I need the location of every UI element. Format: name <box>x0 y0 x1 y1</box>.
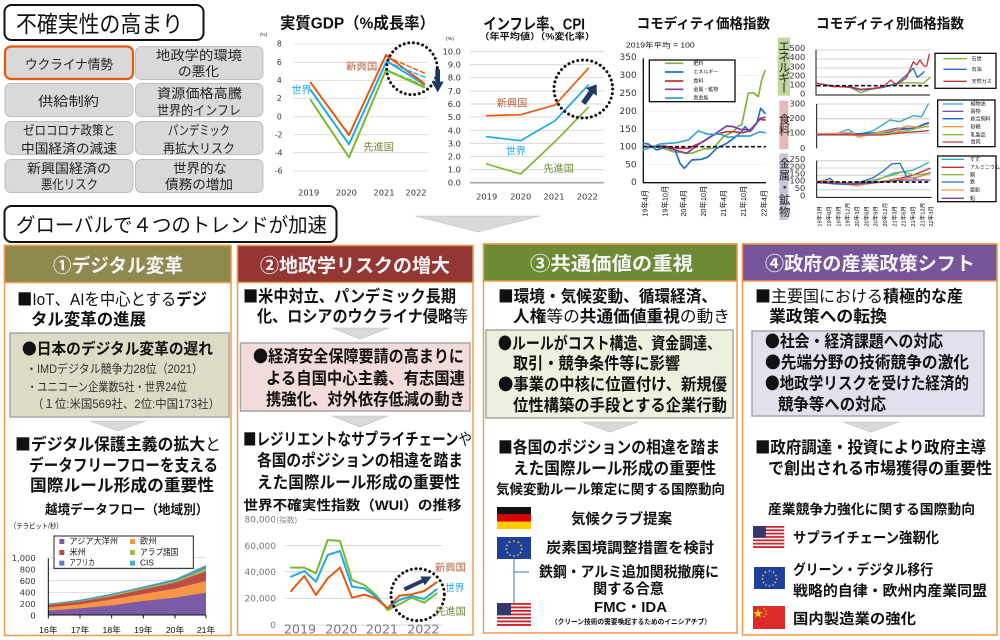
factor: zero covid: 中国経済の減速 <box>21 141 117 156</box>
callout: Japan's digital lag: （１位:米国569社、2位:中国173社） <box>32 396 220 411</box>
callout: rules and corporate action: ●事業の中核に位置付け、新規優 <box>498 371 727 395</box>
factor: supply constraints <box>5 84 133 116</box>
flag: China <box>753 606 785 629</box>
panel: 3 shared value <box>484 244 737 633</box>
metals x-axis labels <box>816 203 935 227</box>
callout: Japan's digital lag: ・IMDデジタル競争力28位（2021） <box>26 361 203 376</box>
chart: CPI inflation: (%) <box>446 36 454 42</box>
chart: cross-border data flow: 16年 <box>39 624 58 635</box>
text: carbon border adjustment: 炭素国境調整措置を検討 <box>546 539 715 557</box>
metals x-axis labels: 21年12月 <box>918 203 926 227</box>
text: digital protectionism: ■デジタル保護主義の拡大と <box>15 431 221 455</box>
panel: 1 digital transformation <box>4 246 231 636</box>
food legend <box>938 100 995 147</box>
energy line chart: 100 <box>789 80 805 90</box>
chart: CPI inflation: 先進国 <box>543 162 574 175</box>
chart: cross-border data flow: 800 <box>20 564 36 574</box>
metals legend: 鉛 <box>970 195 975 202</box>
panel: 2 geopolitical risk <box>238 246 473 637</box>
factor: resource prices: 資源価格高騰 <box>157 86 242 101</box>
metals x-axis labels: 21年3月 <box>890 206 898 227</box>
text: government-led markets: で創出される市場獲得の重要性 <box>768 458 992 478</box>
category label: food <box>778 101 790 149</box>
chart: commodity price index: 21年4月 <box>719 190 728 217</box>
chart: real GDP growth: 2019 <box>298 188 319 198</box>
header: digital transformation: ①デジタル変革 <box>53 254 183 277</box>
data flow legend: CIS <box>140 558 154 568</box>
metals x-axis labels: 22年3月 <box>927 206 935 227</box>
callout: economic security: ●経済安全保障要請の高まりに <box>253 343 464 367</box>
metals x-axis labels: 19年6月 <box>825 206 833 227</box>
text: environment and human rights <box>498 283 730 326</box>
chart: CPI inflation: 2020 <box>510 191 531 201</box>
chart: CPI inflation: 7.0 <box>448 86 461 96</box>
chart: price index by commodity <box>777 14 1000 227</box>
text: green digital transition: グリーン・デジタル移行 <box>793 561 933 579</box>
energy legend: 石油 <box>972 66 982 73</box>
food legend: 乳製品 <box>971 131 986 138</box>
chart: commodity price index: 150 <box>620 125 637 135</box>
text: steel and aluminium agreement: 鉄鋼・アルミ追加関税撤廃に <box>539 563 719 581</box>
chart: CPI inflation <box>442 15 613 201</box>
header: industrial policy: ④政府の産業政策シフト <box>765 253 975 275</box>
chart: real GDP growth <box>260 13 444 198</box>
flag: USA <box>497 603 531 626</box>
chart: CPI inflation: 3.0 <box>448 138 461 148</box>
callout: Japan's digital lag <box>10 333 229 417</box>
chart: world uncertainty index: 世界 <box>445 583 464 595</box>
metals x-axis labels: 20年6月 <box>862 206 870 227</box>
chart: world uncertainty index: 2019 <box>284 622 316 637</box>
callout: policy drivers: ●社会・経済課題への対応 <box>765 328 943 352</box>
text: US-China, pandemic, Russia: ■米中対立、パンデミック長期 <box>243 283 456 307</box>
chart: world uncertainty index: 先進国 <box>435 605 466 618</box>
text: FMC IDA: （クリーン技術の需要喚起するためのイニシアチブ） <box>551 617 711 626</box>
callout: rules and corporate action <box>486 330 733 418</box>
text: digital transformation progress: タル変革の進展 <box>31 310 146 329</box>
text: active industrial policy <box>755 283 963 326</box>
food line chart: 200 <box>789 113 805 123</box>
chart: commodity price index: 22年4月 <box>760 190 769 217</box>
energy line chart: 200 <box>789 70 805 80</box>
category label: metals: 金属・鉱物 <box>778 157 790 217</box>
chart: cross-border data flow: 18年 <box>103 624 121 635</box>
chart: CPI inflation: 6.0 <box>448 99 461 109</box>
chart: real GDP growth: 新興国 <box>346 60 377 73</box>
energy line chart: 300 <box>789 61 805 71</box>
text: green digital transition <box>793 561 988 600</box>
text: resilient supply chains: ■レジリエントなサプライチェーンや <box>243 426 472 450</box>
food legend: 砂糖 <box>971 123 981 130</box>
text: environment and human rights: 人権等の共通価値重視の動き <box>513 307 730 326</box>
chart: cross-border data flow <box>10 502 215 635</box>
metals line chart: 50 <box>795 183 805 193</box>
header: geopolitical risk: ②地政学リスクの増大 <box>260 254 450 277</box>
chart: CPI inflation: （年平均値）（%変化率） <box>479 30 595 41</box>
chart: commodity price index: 250 <box>620 89 637 99</box>
callout: rules and corporate action: 取引・競争条件等に影響 <box>513 353 680 373</box>
text: green digital transition: 戦略的自律・欧州内産業同盟 <box>793 582 988 600</box>
food legend: 食肉 <box>971 139 981 146</box>
metals line chart: 250 <box>789 154 805 164</box>
energy line chart: 400 <box>789 52 805 62</box>
metals x-axis labels: 19年3月 <box>816 206 824 227</box>
factor: emerging economies <box>5 160 133 192</box>
heading: four global trends <box>4 206 336 242</box>
chart: CPI inflation: 2019 <box>476 191 497 201</box>
by-commodity title: コモディティ別価格指数 <box>816 14 965 32</box>
chart: cross-border data flow: 1,000 <box>12 553 36 563</box>
heading: uncertainty <box>4 5 204 40</box>
chart: world uncertainty index: 20,000 <box>245 595 276 605</box>
text: government-led markets <box>755 434 992 478</box>
metals legend: 銅 <box>970 171 975 178</box>
chart: cross-border data flow: 600 <box>20 576 36 586</box>
factor: pandemic <box>136 122 263 156</box>
category label: energy: エネルギー <box>777 40 791 94</box>
chart: real GDP growth: 8 <box>277 40 282 49</box>
text: domestic manufacturing: 国内製造業の強化 <box>793 610 917 628</box>
callout: economic security: よる自国中心主義、有志国連 <box>266 368 465 388</box>
food line chart: 300 <box>789 98 805 108</box>
chart: commodity price index: 21年10月 <box>739 186 748 217</box>
food legend: 総合飼料 <box>971 115 991 122</box>
chart: real GDP growth: 先進国 <box>363 140 394 153</box>
factor: zero covid: ゼロコロナ政策と <box>23 123 115 138</box>
text: US-China, pandemic, Russia: 化、ロシアのウクライナ侵略等 <box>257 307 468 326</box>
chart: real GDP growth: 2021 <box>373 188 395 198</box>
callout: policy drivers: 競争等への対応 <box>778 394 886 414</box>
text: resilient supply chains: 各国のポジションの相違を踏ま <box>257 450 463 470</box>
text: steel and aluminium agreement <box>539 563 719 598</box>
commodity index legend: 肥料 <box>693 60 703 67</box>
energy line chart <box>789 43 930 99</box>
callout: Japan's digital lag: ●日本のデジタル変革の遅れ <box>22 337 213 359</box>
CPI title: インフレ率、CPI <box>483 15 585 33</box>
arrow: down <box>90 421 146 431</box>
chart: commodity price index: 20年4月 <box>679 190 688 217</box>
chart: cross-border data flow: 20年 <box>166 624 184 635</box>
chart: real GDP growth: 0 <box>277 112 282 121</box>
text: digital transformation progress <box>17 286 207 329</box>
energy legend: 天然ガス <box>972 78 992 85</box>
chart: real GDP growth: 2 <box>277 94 282 103</box>
data flow title: 越境データフロー（地域別） <box>45 502 208 517</box>
commodity index legend: エネルギー <box>693 70 718 76</box>
food legend: 穀物 <box>971 108 981 115</box>
data flow legend: 米州 <box>69 547 86 557</box>
chart: world uncertainty index: 60,000 <box>245 542 276 552</box>
chart: world uncertainty index: 2022 <box>407 622 439 637</box>
chart: commodity price index: 200 <box>620 107 637 117</box>
chart: real GDP growth: -6 <box>275 167 283 176</box>
metals x-axis labels: 21年6月 <box>900 206 908 227</box>
food line chart: 0 <box>800 143 805 153</box>
chart: cross-border data flow: 0 <box>30 610 36 620</box>
chart: CPI inflation: 9.0 <box>448 60 461 70</box>
commodity index legend: 金属・鉱物 <box>693 86 718 93</box>
connector line <box>514 559 529 603</box>
text: government-led markets: ■政府調達・投資により政府主導 <box>755 434 986 458</box>
metals legend: すず <box>970 156 980 163</box>
food legend: 植物油 <box>971 101 986 108</box>
chart: real GDP growth: (%) <box>260 32 268 37</box>
text: steel and aluminium agreement: 関する合意 <box>593 581 664 598</box>
metals x-axis labels: 20年12月 <box>881 203 889 227</box>
metals x-axis labels: 20年9月 <box>872 206 880 227</box>
chart: real GDP growth: 2020 <box>336 188 357 198</box>
metals x-axis labels: 19年9月 <box>834 206 842 227</box>
metals line chart <box>789 154 932 200</box>
data flow legend: アラブ諸国 <box>140 547 178 557</box>
metals line chart: 200 <box>789 161 805 171</box>
text: digital protectionism <box>15 431 221 495</box>
chart: cross-border data flow: 17年 <box>71 624 89 635</box>
metals x-axis labels: 19年12月 <box>844 203 852 227</box>
factor: supply constraints: 供給制約 <box>38 94 99 109</box>
GDP title: 実質GDP（%成長率） <box>280 13 435 32</box>
metals line chart: 0 <box>800 190 805 200</box>
energy legend: 石炭 <box>972 55 982 62</box>
heading: uncertainty: 不確実性の高まり <box>16 11 183 37</box>
chart: CPI inflation: 新興国 <box>497 97 527 110</box>
text: active industrial policy: 業政策への転換 <box>769 306 888 326</box>
metals line chart: 100 <box>789 176 805 186</box>
factor: Ukraine: ウクライナ情勢 <box>25 57 113 72</box>
factor: pandemic: 再拡大リスク <box>163 141 235 156</box>
subheading: climate rule trends: 気候変動ルール策定に関する国際動向 <box>496 481 725 497</box>
data flow legend: アフリカ <box>69 558 95 568</box>
chart: real GDP growth: 4 <box>277 76 282 85</box>
chart: CPI inflation: 2.0 <box>448 152 461 162</box>
chart: world uncertainty index: 0 <box>270 621 276 631</box>
text: US-China, pandemic, Russia <box>243 283 468 326</box>
chart: commodity price index: 19年4月 <box>641 190 650 217</box>
food line chart <box>789 98 930 153</box>
chart: real GDP growth: -2 <box>275 130 283 139</box>
data flow legend: アジア大洋州 <box>69 536 118 546</box>
header: shared value: ③共通価値の重視 <box>530 253 693 275</box>
text: FMC IDA: FMC・IDA <box>594 600 668 616</box>
chart: commodity price index: 20年10月 <box>699 186 708 217</box>
subheading: industrial competitiveness trends: 産業競争力強化に関する国際動向 <box>768 501 975 517</box>
chart: commodity price index: 0 <box>631 178 637 188</box>
text: international rule making: ■各国のポジションの相違を踏ま <box>498 434 720 458</box>
header: geopolitical risk <box>238 246 473 282</box>
flag: Germany <box>497 507 531 529</box>
text: digital transformation progress: ■IoT、AIを中心とするデジ <box>17 286 207 310</box>
commodity index legend: 食料 <box>693 78 703 85</box>
flag: EU <box>754 567 785 589</box>
metals line chart: 150 <box>789 169 805 179</box>
factor: geopolitics <box>136 46 263 80</box>
chart: CPI inflation: 0.0 <box>448 178 461 188</box>
factor: debt <box>136 160 263 192</box>
chart: world uncertainty index: 2021 <box>366 622 398 637</box>
chart: CPI inflation: 10.0 <box>442 47 461 57</box>
callout: Japan's digital lag: ・ユニコーン企業数5社・世界24位 <box>27 379 187 394</box>
chart: cross-border data flow: 19年 <box>134 624 153 635</box>
arrow: down <box>582 422 638 432</box>
chart: world uncertainty index <box>243 497 466 637</box>
flag: USA <box>753 526 784 548</box>
chart: world uncertainty index: 40,000 <box>245 568 276 578</box>
arrow: down <box>332 416 388 427</box>
factor: Ukraine <box>5 46 133 79</box>
metals x-axis labels: 20年3月 <box>853 206 861 227</box>
text: environment and human rights: ■環境・気候変動、循環経済、 <box>498 283 717 307</box>
header: industrial policy <box>742 244 997 281</box>
food line chart: 100 <box>789 128 805 138</box>
chart: real GDP growth: 2022 <box>405 188 427 198</box>
chart: CPI inflation: 2021 <box>543 191 565 201</box>
commodity index legend <box>649 60 735 102</box>
commodity index legend: 貴金属 <box>693 95 708 102</box>
metals legend: 鉄 <box>970 179 975 186</box>
callout: policy drivers <box>752 328 984 416</box>
chart: world uncertainty index: (指数) <box>277 514 298 524</box>
callout: rules and corporate action: 位性構築の手段とする企業行動 <box>513 395 727 415</box>
text: digital protectionism: 国際ルール形成の重要性 <box>30 475 214 495</box>
chart: cross-border data flow: 400 <box>20 588 36 598</box>
factor: zero covid <box>5 122 133 156</box>
chart: real GDP growth: -4 <box>275 148 283 157</box>
chart: CPI inflation: 8.0 <box>448 73 461 83</box>
chart: CPI inflation: 5.0 <box>448 112 461 122</box>
factor: geopolitics: の悪化 <box>178 64 219 79</box>
metals x-axis labels: 21年9月 <box>909 206 917 227</box>
header: shared value <box>484 244 737 281</box>
commodity index title: コモディティ価格指数 <box>637 14 771 32</box>
factor: resource prices: 世界的インフレ <box>157 103 241 118</box>
chart: CPI inflation: 4.0 <box>448 125 461 135</box>
chart: world uncertainty index: 2020 <box>325 622 357 637</box>
chart: real GDP growth: 6 <box>277 58 282 67</box>
data flow legend: 欧州 <box>140 536 157 546</box>
header: digital transformation <box>4 246 231 282</box>
text: international rule making <box>498 434 720 478</box>
callout: policy drivers: ●先端分野の技術競争の激化 <box>765 349 969 373</box>
text: climate club: 気候クラブ提案 <box>571 510 672 528</box>
chart: cross-border data flow: 21年 <box>197 624 215 635</box>
heading: four global trends: グローバルで４つのトレンドが加速 <box>16 214 327 237</box>
energy line chart: 500 <box>789 43 805 53</box>
factor: geopolitics: 地政学的環境 <box>156 48 242 63</box>
category label: food: 食料 <box>778 113 790 137</box>
text: resilient supply chains <box>243 426 472 492</box>
text: resilient supply chains: えた国際ルール形成の重要性 <box>257 472 460 492</box>
text: active industrial policy: ■主要国における積極的な産 <box>755 283 963 307</box>
text: supply chain: サプライチェーン強靭化 <box>793 530 939 547</box>
energy line chart: 0 <box>800 89 805 99</box>
metals legend: 亜鉛 <box>970 187 980 194</box>
arrow: from uncertainty to trends <box>415 216 540 232</box>
text: international rule making: えた国際ルール形成の重要性 <box>513 458 716 478</box>
arrow: down <box>843 422 899 432</box>
chart: CPI inflation: 2022 <box>577 191 598 201</box>
WUI title: 世界不確実性指数（WUI）の推移 <box>243 497 462 513</box>
data flow legend <box>54 536 193 568</box>
factor: emerging economies: 新興国経済の <box>27 161 111 176</box>
callout: policy drivers: ●地政学リスクを受けた経済的 <box>765 370 969 394</box>
panel: uncertainty factors <box>5 46 263 192</box>
panel: 4 industrial policy shift <box>742 244 997 635</box>
energy legend <box>935 53 996 88</box>
chart: commodity price index: 350 <box>620 53 637 63</box>
factor: pandemic: パンデミック <box>168 123 230 138</box>
chart: CPI inflation: 1.0 <box>448 165 461 175</box>
callout: rules and corporate action: ●ルールがコスト構造、資金調達、 <box>498 330 721 354</box>
chart: commodity price index: 19年10月 <box>661 186 670 217</box>
flag: EU <box>497 537 531 559</box>
metals legend <box>938 156 1000 202</box>
factor: debt: 世界的な <box>173 161 227 176</box>
arrow: down <box>332 328 389 339</box>
factor: resource prices <box>136 84 263 118</box>
chart: commodity price index: 2019年平均 = 100 <box>626 41 695 50</box>
chart: commodity price index: 300 <box>620 71 637 81</box>
callout: economic security <box>240 343 470 411</box>
text: FMC IDA <box>551 600 711 626</box>
factor: emerging economies: 悪化リスク <box>41 177 98 192</box>
metals legend: アルミニウム <box>970 164 1000 171</box>
chart: real GDP growth: 世界 <box>292 85 312 97</box>
chart: cross-border data flow: （テラビット/秒） <box>10 520 63 530</box>
factor: debt: 債務の増加 <box>165 177 233 192</box>
chart: commodity price index: 100 <box>620 143 637 153</box>
chart: world uncertainty index: 新興国 <box>435 561 466 574</box>
chart: commodity price index <box>620 14 771 217</box>
chart: CPI inflation: 世界 <box>506 146 526 158</box>
chart: world uncertainty index: 80,000 <box>245 516 276 526</box>
chart: commodity price index: 50 <box>625 160 637 170</box>
text: digital protectionism: データフリーフローを支える <box>29 455 218 475</box>
chart: cross-border data flow: 200 <box>20 599 36 609</box>
callout: economic security: 携強化、対外依存低減の動き <box>266 389 465 409</box>
